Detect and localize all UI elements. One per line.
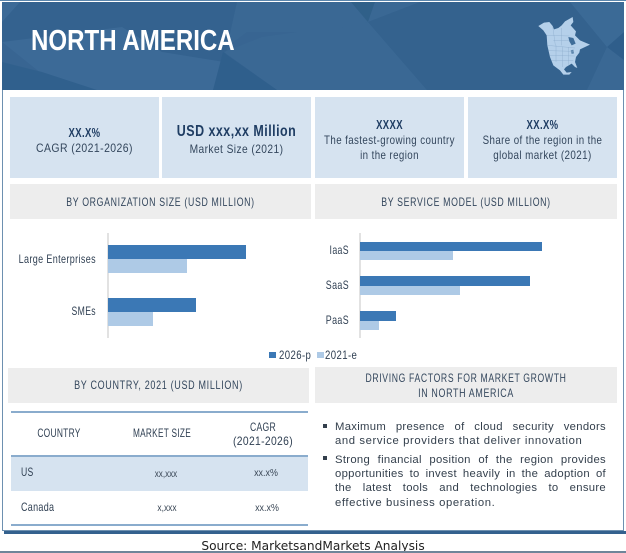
Canada name: Canada	[21, 500, 54, 514]
heading line 2: IN NORTH AMERICA	[418, 386, 514, 400]
bar: PaaS 2021-e	[360, 320, 379, 330]
legend swatch: 2021-e	[317, 352, 324, 358]
factor 2 line 1: Strong financial position of the region provides	[335, 454, 606, 466]
table bottom rule	[11, 524, 308, 526]
Canada market size: x,xxx	[157, 502, 177, 514]
bar: SaaS 2026-p	[360, 276, 530, 286]
bar: SMEs 2026-p	[108, 298, 196, 312]
US CAGR: xx.x%	[254, 467, 278, 479]
row: Canada	[21, 500, 279, 514]
label: PaaS: PaaS	[326, 313, 349, 327]
bar: Large Enterprises 2026-p	[108, 245, 246, 259]
bar chart: organization size	[19, 233, 246, 338]
KPI caption line 1: Share of the region in the	[483, 133, 602, 147]
source note: Source: MarketsandMarkets Analysis	[201, 539, 425, 553]
table: by country	[11, 411, 308, 526]
bar: SaaS 2021-e	[360, 286, 460, 295]
bar: IaaS 2026-p	[360, 242, 542, 251]
axis	[107, 233, 109, 338]
heading: driving factors	[315, 367, 617, 403]
bar: IaaS 2021-e	[360, 251, 453, 260]
label: SMEs: SMEs	[72, 304, 96, 318]
KPI value: XX.X%	[69, 125, 100, 140]
title: NORTH AMERICA	[31, 25, 235, 57]
row: US	[11, 457, 308, 491]
Canada CAGR: xx.x%	[255, 502, 279, 514]
column head: CAGR: CAGR	[250, 420, 276, 434]
label: IaaS: IaaS	[330, 243, 349, 257]
legend label: 2021-e: 2021-e	[325, 348, 357, 362]
top edge line	[0, 0, 626, 1]
KPI caption: Market Size (2021)	[190, 142, 283, 156]
axis	[359, 233, 361, 338]
US market size: xx,xxx	[155, 468, 177, 480]
KPI value: USD xxx,xx Million	[177, 123, 296, 140]
KPI: CAGR	[10, 97, 159, 178]
heading text: BY COUNTRY, 2021 (USD MILLION)	[74, 378, 243, 392]
factor 2 line 4: effective business operation.	[335, 497, 495, 509]
column head: CAGR period: (2021-2026)	[233, 434, 293, 448]
heading: organization size	[10, 184, 311, 219]
KPI: market size	[162, 97, 311, 178]
bottom edge line	[0, 551, 626, 553]
KPI caption line 2: global market (2021)	[493, 148, 592, 162]
heading text: BY SERVICE MODEL (USD MILLION)	[381, 195, 551, 209]
KPI caption line 2: in the region	[360, 148, 419, 162]
factor 1 line 2: and service providers that deliver innovation	[335, 435, 582, 447]
KPI: regional share	[468, 97, 617, 178]
column head: market size: MARKET SIZE	[133, 426, 191, 440]
heading text: BY ORGANIZATION SIZE (USD MILLION)	[66, 195, 255, 209]
factor 2 line 2: opportunities to invest heavily in the adoption of	[335, 468, 606, 480]
header banner	[2, 2, 624, 90]
heading: service model	[315, 184, 617, 219]
KPI value: XX.X%	[527, 117, 558, 132]
bottom dark rule	[4, 531, 626, 534]
bullet 2	[323, 456, 327, 460]
heading line 1: DRIVING FACTORS FOR MARKET GROWTH	[365, 371, 567, 385]
bar: PaaS 2026-p	[360, 311, 396, 320]
bar: Large Enterprises 2021-e	[108, 259, 187, 273]
KPI: fastest-growing country	[315, 97, 464, 178]
bullet 1	[323, 424, 327, 428]
header rule	[11, 455, 308, 457]
bar: SMEs 2021-e	[108, 312, 153, 326]
icon: North America map	[538, 17, 590, 75]
KPI caption line 1: The fastest-growing country	[324, 133, 455, 147]
driving factors list	[323, 421, 606, 509]
bar chart: service model	[326, 233, 542, 338]
KPI caption: CAGR (2021-2026)	[36, 141, 133, 155]
factor 1 line 1: Maximum presence of cloud security vendors	[335, 421, 606, 433]
column head: country: COUNTRY	[37, 426, 81, 440]
legend	[269, 348, 357, 362]
heading: by country	[8, 368, 309, 403]
table top rule	[11, 411, 308, 413]
legend swatch: 2026-p	[269, 352, 276, 358]
KPI value: XXXX	[376, 117, 403, 132]
label: SaaS: SaaS	[326, 278, 349, 292]
US name: US	[21, 465, 34, 479]
legend label: 2026-p: 2026-p	[279, 348, 311, 362]
label: Large Enterprises: Large Enterprises	[19, 252, 96, 266]
factor 2 line 3: the latest tools and technologies to ensure	[335, 482, 606, 494]
header polygon background	[62, 2, 624, 90]
